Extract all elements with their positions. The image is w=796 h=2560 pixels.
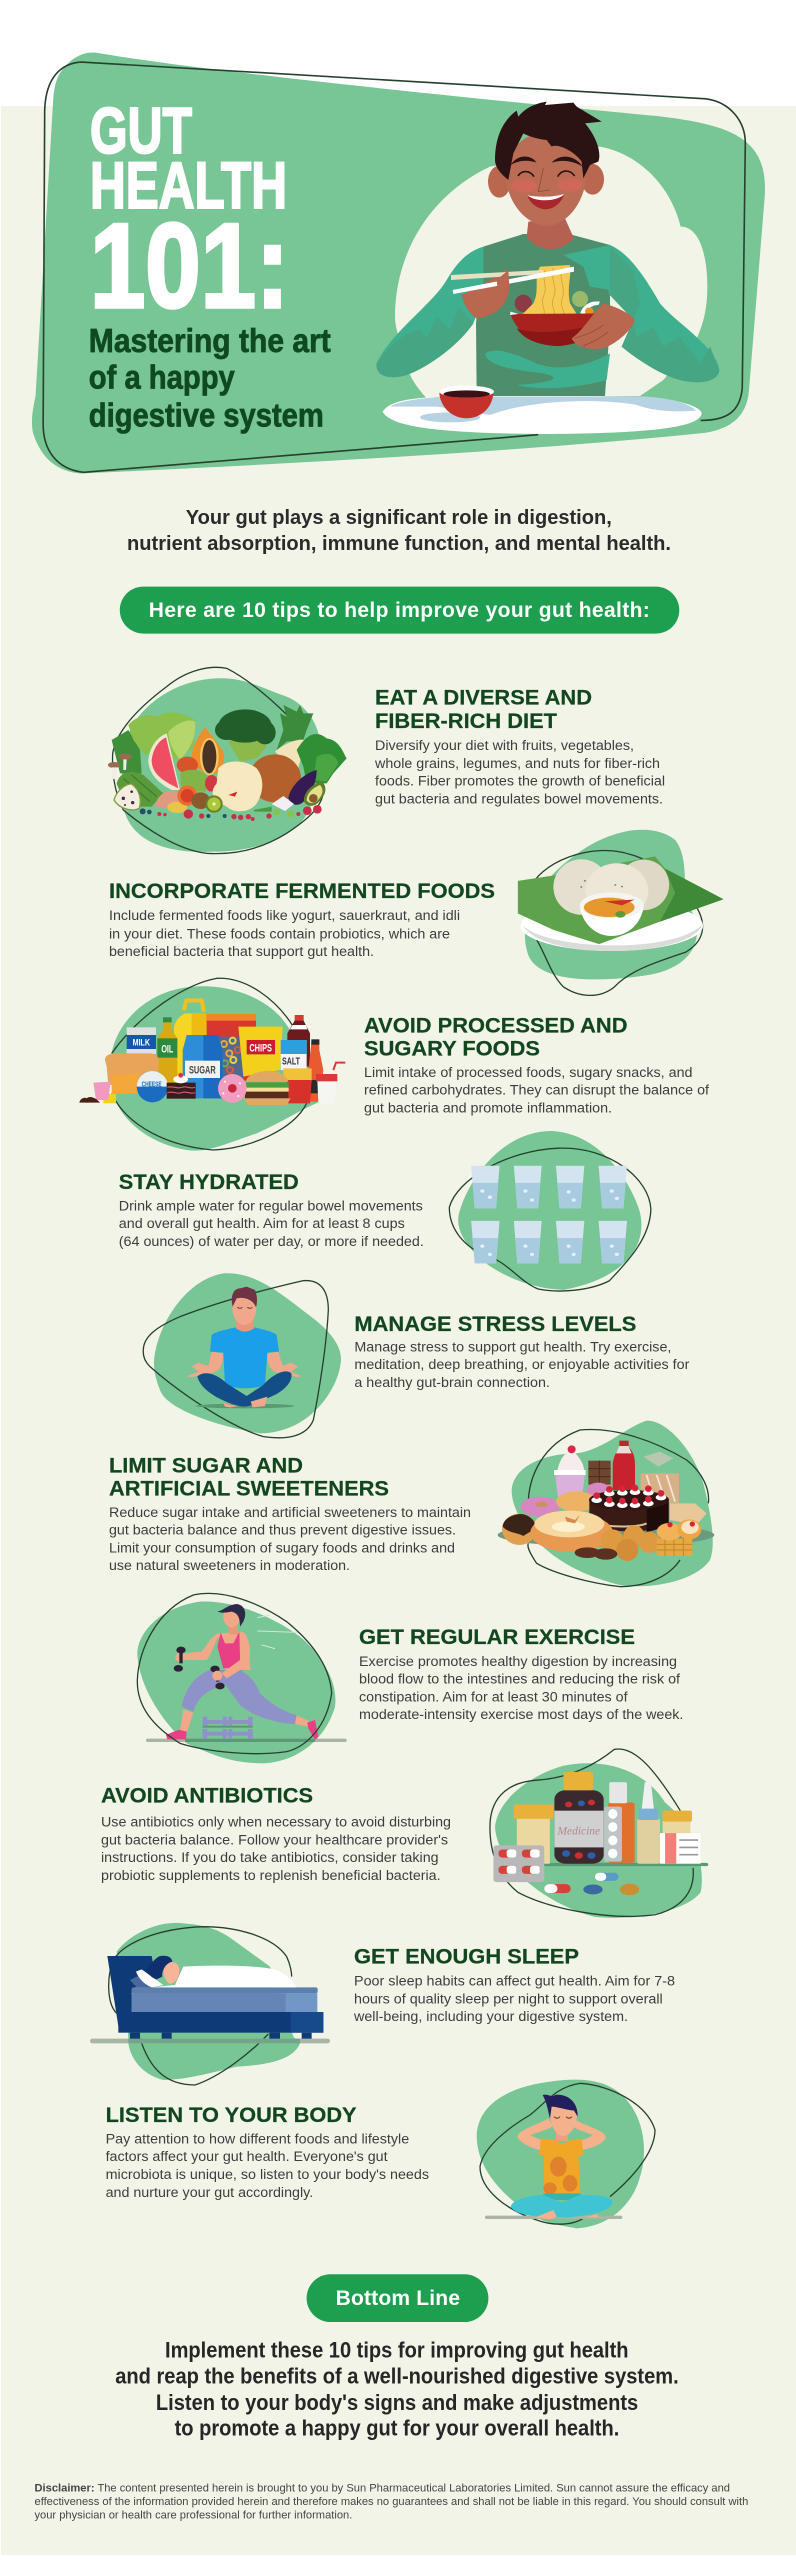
intro text (127, 507, 671, 555)
bottom line pill (307, 2274, 488, 2322)
illustration: man relaxing with hands behind head (477, 2080, 655, 2228)
body text: hours of quality sleep per night to support overall (354, 1991, 663, 2006)
body text: (64 ounces) of water per day, or more if needed. (119, 1234, 424, 1249)
body text: blood flow to the intestines and reducing the risk of (359, 1671, 680, 1686)
body text: whole grains, legumes, and nuts for fiber-rich (374, 756, 660, 771)
body text (353, 1974, 675, 2024)
panel: tip 2 fermented foods (109, 830, 723, 995)
conclusion text: Listen to your body's signs and make adjustments (156, 2390, 638, 2415)
body text (354, 1339, 690, 1390)
tips banner pill (120, 587, 679, 634)
illustration: medicine bottles and pills (490, 1749, 708, 1918)
heading: GET ENOUGH SLEEP (354, 1945, 579, 1968)
illustration: medicine bottles and pills: Medicine (557, 1825, 601, 1837)
subtitle: digestive system (89, 396, 324, 434)
body text: Reduce sugar intake and artificial sweeteners to maintain (109, 1505, 471, 1520)
body text (359, 1654, 683, 1722)
body text: microbiota is unique, so listen to your body's needs (106, 2167, 429, 2182)
body text: moderate-intensity exercise most days of the week. (359, 1707, 683, 1722)
illustration: man eating noodles (377, 102, 719, 434)
illustration: idli on banana leaf (518, 830, 723, 995)
body text: meditation, deep breathing, or enjoyable activities for (354, 1357, 690, 1372)
disclaimer: effectiveness of the information provided herein and therefore makes no guarantees and shall not be liable in this regard. You should consult with (34, 2496, 748, 2508)
tips banner pill: Here are 10 tips to help improve your gut health: (149, 599, 650, 622)
heading: AVOID ANTIBIOTICS (101, 1784, 313, 1808)
illustration: eight glasses of water (449, 1131, 651, 1291)
title (90, 94, 289, 333)
body text: Exercise promotes healthy digestion by increasing (359, 1654, 677, 1669)
body text: a healthy gut-brain connection. (354, 1375, 550, 1390)
panel: tip 3 processed foods (79, 978, 709, 1151)
disclaimer: Disclaimer: The content presented herein is brought to you by Sun Pharmaceutical Laboratories Limited. Sun cannot assure the efficacy and (34, 2482, 730, 2494)
panel: tip 5 manage stress (143, 1273, 690, 1438)
illustration: processed food products: SUGAR (189, 1064, 216, 1076)
disclaimer (34, 2482, 748, 2521)
heading (109, 1454, 389, 1500)
hero green blob (32, 53, 765, 474)
heading: GET REGULAR EXERCISE (359, 1626, 635, 1649)
illustration: processed food products: SALT (282, 1056, 300, 1067)
subtitle: of a happy (89, 359, 235, 396)
panel: hero banner (32, 53, 765, 474)
conclusion text: to promote a happy gut for your overall health. (175, 2416, 619, 2441)
title: HEALTH (90, 148, 287, 222)
panel: tip 8 avoid antibiotics (101, 1749, 708, 1918)
body text: factors affect your gut health. Everyone's gut (106, 2149, 388, 2164)
body text: Poor sleep habits can affect gut health. Aim for 7-8 (354, 1974, 675, 1989)
subtitle (89, 322, 331, 434)
body text: gut bacteria and regulates bowel movements. (375, 791, 663, 806)
body text: Diversify your diet with fruits, vegetables, (375, 738, 634, 753)
body text (109, 1505, 471, 1573)
intro text: Your gut plays a significant role in digestion, (186, 507, 612, 529)
body text: foods. Fiber promotes the growth of beneficial (375, 774, 665, 789)
heading: STAY HYDRATED (119, 1171, 299, 1194)
body text: gut bacteria balance and thus prevent digestive issues. (109, 1523, 456, 1538)
body text: and overall gut health. Aim for at least 8 cups (119, 1216, 405, 1231)
body text (364, 1065, 709, 1115)
heading: LIMIT SUGAR AND (109, 1454, 303, 1477)
body text: Manage stress to support gut health. Try exercise, (354, 1339, 671, 1354)
body text (101, 1815, 451, 1883)
illustration: processed food products: OIL (161, 1043, 174, 1055)
body text (374, 738, 665, 806)
body text: beneficial bacteria that support gut health. (109, 944, 374, 959)
body text: probiotic supplements to replenish beneficial bacteria. (101, 1868, 441, 1883)
body text: Limit intake of processed foods, sugary snacks, and (364, 1065, 692, 1080)
heading: FIBER-RICH DIET (375, 710, 557, 733)
body text: well-being, including your digestive system. (353, 2009, 628, 2024)
heading: ARTIFICIAL SWEETENERS (109, 1478, 389, 1500)
illustration: processed food products: MILK (133, 1038, 150, 1048)
body text: in your diet. These foods contain probiotics, which are (109, 926, 450, 941)
body text (106, 2132, 429, 2200)
disclaimer: your physician or health care professional for further information. (34, 2509, 352, 2521)
heading: SUGARY FOODS (364, 1038, 540, 1061)
illustration: processed food products: CHEESE (142, 1081, 162, 1088)
heading: EAT A DIVERSE AND (375, 686, 592, 710)
heading: AVOID PROCESSED AND (364, 1015, 628, 1038)
heading: LISTEN TO YOUR BODY (106, 2104, 357, 2127)
body text: Use antibiotics only when necessary to avoid disturbing (101, 1815, 451, 1830)
panel: tip 1 diverse diet (108, 667, 665, 854)
illustration: sweets and desserts (498, 1421, 714, 1587)
body text (119, 1198, 424, 1249)
body text: gut bacteria balance. Follow your healthcare provider's (101, 1832, 448, 1848)
illustration: fruits and vegetables (108, 667, 347, 854)
heading (375, 686, 592, 733)
panel: tip 6 limit sugar (109, 1421, 714, 1587)
panel: tip 4 stay hydrated (119, 1131, 651, 1291)
body text: Pay attention to how different foods and lifestyle (106, 2132, 409, 2147)
conclusion text: Implement these 10 tips for improving gut health (165, 2338, 628, 2363)
body text (109, 908, 460, 959)
intro text: nutrient absorption, immune function, and mental health. (127, 533, 671, 555)
hero outline (43, 62, 745, 472)
heading (364, 1015, 628, 1061)
conclusion text (115, 2338, 679, 2441)
body text: Drink ample water for regular bowel movements (119, 1198, 423, 1213)
panel: tip 9 enough sleep (90, 1923, 675, 2085)
body text: constipation. Aim for at least 30 minutes of (359, 1689, 628, 1704)
body text: gut bacteria and promote inflammation. (364, 1100, 612, 1115)
illustration: person sleeping in bed (90, 1923, 330, 2085)
heading: INCORPORATE FERMENTED FOODS (109, 880, 495, 903)
illustration: meditating man (143, 1273, 341, 1438)
panel: tip 10 listen to your body (106, 2080, 655, 2228)
panel: tip 7 regular exercise (137, 1593, 683, 1763)
body text: use natural sweeteners in moderation. (109, 1558, 350, 1573)
illustration: processed food products (79, 978, 345, 1151)
body text: Include fermented foods like yogurt, sauerkraut, and idli (109, 908, 460, 923)
title: 101: (90, 199, 289, 333)
body text: Limit your consumption of sugary foods and drinks and (109, 1540, 455, 1555)
subtitle: Mastering the art (89, 322, 331, 359)
title: GUT (90, 94, 192, 167)
illustration: processed food products: CHIPS (249, 1042, 272, 1054)
heading: MANAGE STRESS LEVELS (354, 1313, 636, 1336)
illustration: woman lunging with dumbbells (137, 1593, 347, 1763)
body text: refined carbohydrates. They can disrupt the balance of (364, 1082, 709, 1097)
body text: and nurture your gut accordingly. (106, 2185, 313, 2200)
conclusion text: and reap the benefits of a well-nourished digestive system. (115, 2364, 679, 2389)
bottom line pill: Bottom Line (336, 2287, 460, 2310)
body text: instructions. If you do take antibiotics, consider taking (101, 1850, 439, 1865)
